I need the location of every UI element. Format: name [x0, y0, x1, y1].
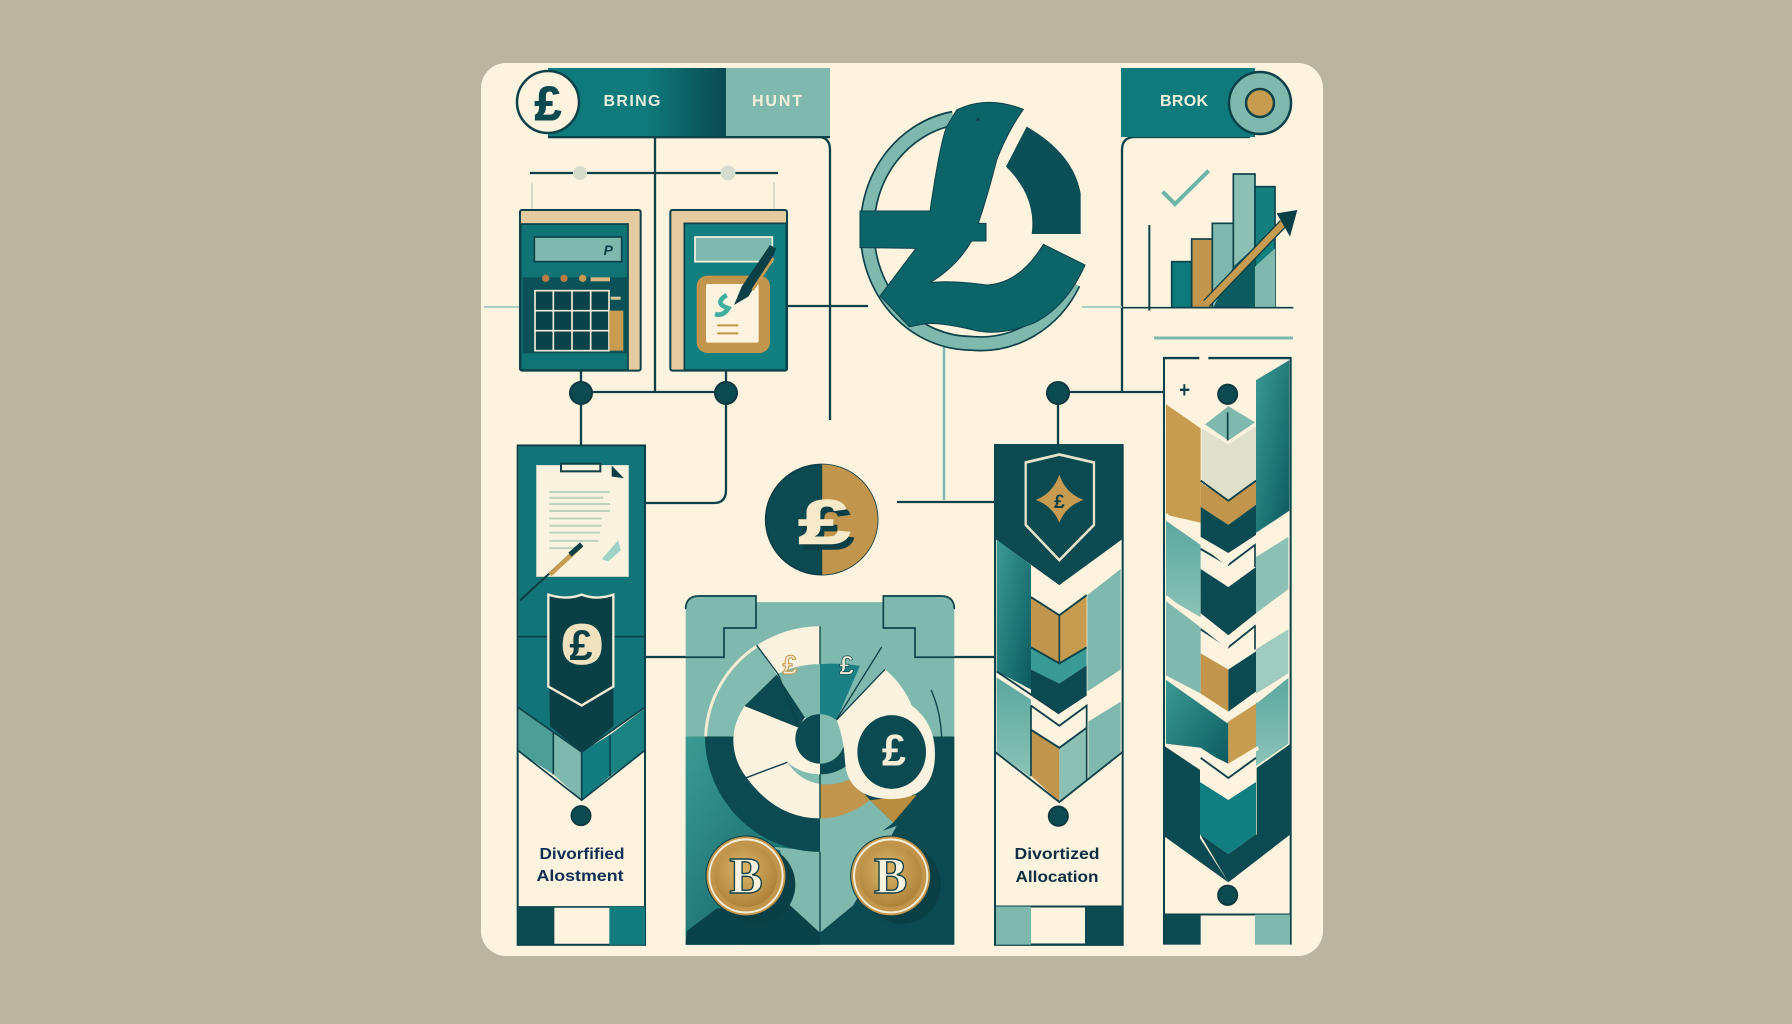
label: divorfified allotment: Alostment: [536, 868, 624, 885]
node: left 1: [570, 382, 592, 404]
header bar: left: HUNT: [752, 93, 802, 110]
header bar: left: [517, 68, 830, 138]
card panel: [481, 63, 1323, 956]
label: divorfified allotment: [536, 846, 624, 885]
bitcoin coin left: [706, 836, 795, 924]
label: divorfified allotment: Divorfified: [540, 846, 624, 863]
callout pound drop: £: [882, 726, 907, 776]
header bar: right: [1121, 68, 1291, 137]
node: [571, 806, 591, 825]
node: left 2: [715, 382, 737, 404]
shield with pound: [548, 595, 613, 705]
callout pound drop: [837, 669, 935, 799]
center pound coin: £: [802, 493, 854, 562]
label: divortized allocation: Allocation: [1016, 869, 1098, 886]
bar chart with arrow: [1122, 171, 1297, 311]
label: divortized allocation: Divortized: [1014, 846, 1100, 863]
plus: [1180, 384, 1189, 395]
label: divortized allocation: [1014, 846, 1100, 886]
panel: right chevron column: [1164, 358, 1291, 945]
header bar: left: BRING: [604, 93, 660, 110]
big pound symbol emblem: [860, 102, 1085, 344]
icon: calculator: [520, 210, 641, 371]
pen: [520, 544, 582, 600]
center pound coin: [766, 464, 878, 575]
panel: middle allocation column: [995, 445, 1123, 945]
shield with pound: £: [569, 621, 593, 669]
icon: note with pen: [670, 210, 787, 371]
bitcoin coin right: B: [874, 847, 907, 904]
small pound teal: £: [839, 650, 854, 681]
bitcoin coin right: [851, 836, 941, 924]
shield with star: [1026, 455, 1094, 560]
node top: [1218, 385, 1237, 404]
center pound coin: £: [798, 488, 850, 557]
bitcoin coin left: B: [729, 847, 763, 904]
panel: pie chart allocation: [686, 595, 954, 945]
node: right: [1047, 382, 1069, 404]
document page: [537, 464, 628, 576]
panel: left allotment column: [518, 445, 645, 945]
small pound gold: £: [783, 649, 798, 680]
header bar: right: BROK: [1160, 93, 1208, 110]
node bottom: [1218, 886, 1237, 905]
shield with star: £: [1054, 492, 1065, 513]
connector dot right: [720, 166, 736, 180]
icon: calculator: P: [604, 242, 614, 258]
node: [1049, 806, 1068, 826]
header bar: left: £: [535, 78, 562, 131]
connector lines: [484, 137, 1293, 657]
connector dot left: [573, 166, 587, 180]
